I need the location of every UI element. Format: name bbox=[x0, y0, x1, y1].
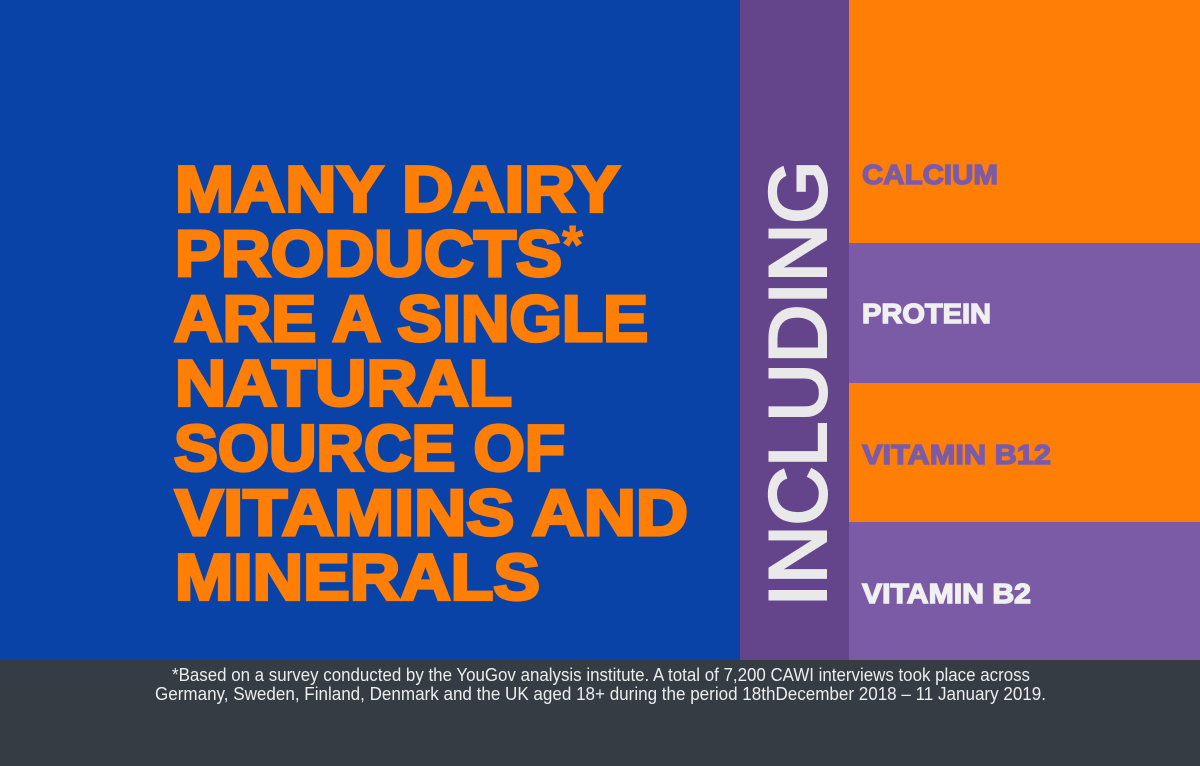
label: vitamin b2: VITAMIN B2 bbox=[862, 578, 1031, 609]
headline bbox=[174, 152, 688, 614]
headline: PRODUCTS bbox=[175, 217, 562, 290]
headline: MANY DAIRY bbox=[175, 152, 620, 226]
panel: protein bbox=[849, 243, 1200, 383]
panel: vitamin b12 bbox=[849, 383, 1200, 522]
panel: footer background bbox=[0, 660, 1200, 766]
headline: MINERALS bbox=[175, 540, 540, 614]
panel: including column bbox=[740, 0, 849, 660]
panel: blue headline background bbox=[0, 0, 740, 660]
panel: calcium bbox=[849, 0, 1200, 243]
headline: ARE A SINGLE bbox=[174, 282, 648, 355]
headline: SOURCE OF bbox=[174, 412, 565, 484]
label: protein: PROTEIN bbox=[862, 298, 991, 329]
panel: vitamin b2 bbox=[849, 522, 1200, 660]
headline: VITAMINS AND bbox=[175, 476, 688, 549]
footnote text: *Based on a survey conducted by the YouGov analysis institute. A total of 7,200 CAWI interviews took place across bbox=[172, 665, 1030, 685]
headline: NATURAL bbox=[175, 346, 512, 420]
label: calcium: CALCIUM bbox=[862, 159, 998, 190]
footnote text bbox=[155, 665, 1046, 704]
vertical label: including: INCLUDING bbox=[754, 160, 844, 606]
footnote text: Germany, Sweden, Finland, Denmark and the UK aged 18+ during the period 18thDecember 2018 – 11 January 2019. bbox=[155, 684, 1046, 704]
label: vitamin b12: VITAMIN B12 bbox=[862, 439, 1051, 470]
headline: * bbox=[562, 215, 583, 275]
